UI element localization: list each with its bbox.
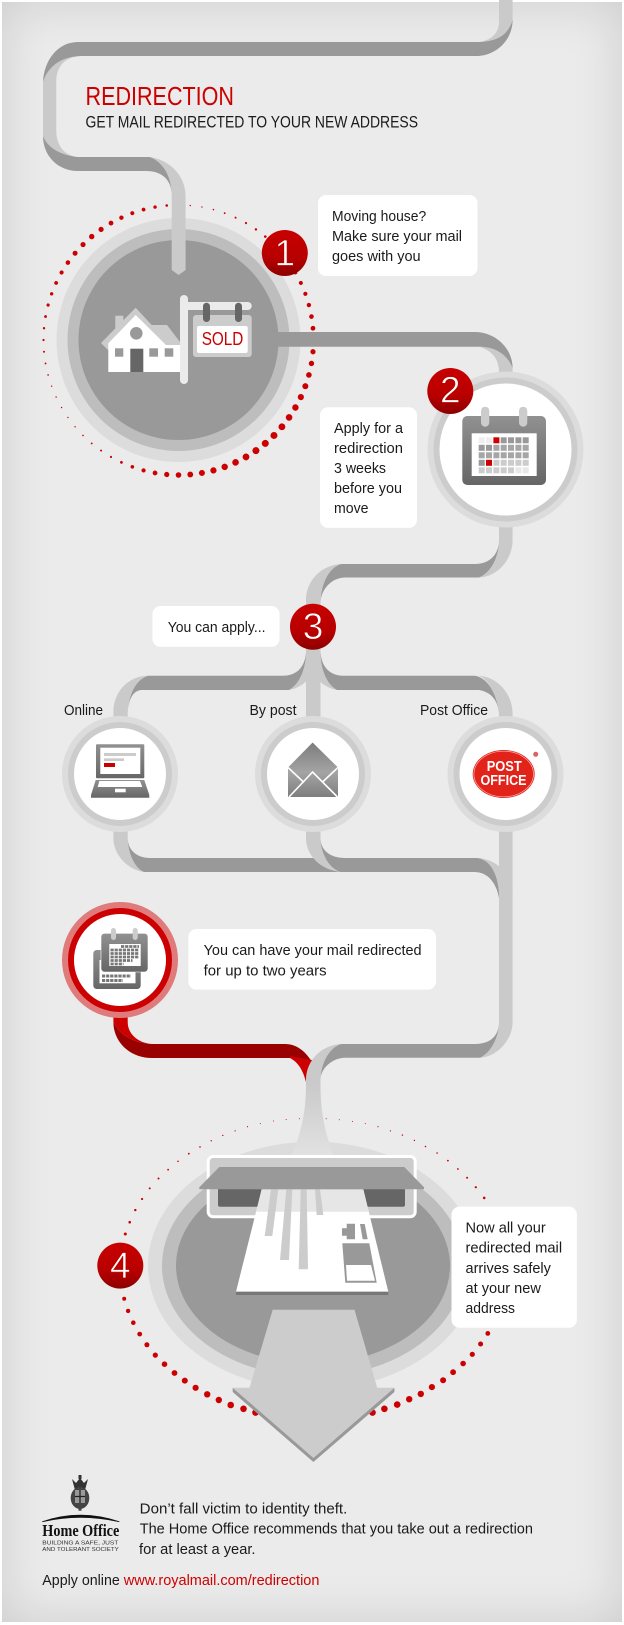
label: by post: By post (250, 702, 297, 719)
footer: apply online link: Apply online (42, 1572, 120, 1589)
badge 2 (427, 368, 473, 414)
callout: apply: before you (334, 480, 402, 497)
circle: post office with logo (448, 716, 564, 832)
callout: you can apply (152, 606, 280, 647)
footer: identity theft advice: Don’t fall victim to identity theft. (140, 1500, 347, 1517)
footer: apply online link (42, 1572, 319, 1589)
label: online: Online (64, 702, 103, 719)
badge 3 (290, 604, 336, 650)
callout: apply (320, 407, 417, 528)
logo: Home Office (42, 1475, 120, 1553)
ribbon: funnel into letterbox (291, 1085, 334, 1157)
circle: step 1 (56, 218, 300, 462)
circle: step 2 (428, 372, 584, 528)
logo: Home Office: BUILDING A SAFE, JUST (42, 1541, 119, 1547)
callout: moving house (318, 195, 478, 276)
callout: arrives safely: at your new (466, 1280, 541, 1297)
callout: you can apply: You can apply... (168, 619, 266, 636)
footer: identity theft advice: for at least a year. (139, 1541, 256, 1558)
dotted ring: step 1 (42, 204, 316, 478)
callout: arrives safely (452, 1207, 577, 1328)
ribbon: step 1 to step 2 (278, 332, 513, 385)
ribbons: merging below the three routes (113, 825, 513, 898)
ellipse: step 4 (148, 1142, 478, 1390)
callout: arrives safely: address (466, 1300, 515, 1317)
ribbon: post office route to letterbox (306, 825, 513, 1090)
ribbons: step 3 branches (113, 645, 513, 725)
title: GET MAIL REDIRECTED TO YOUR NEW ADDRESS (86, 112, 418, 131)
label: post office: Post Office (420, 702, 488, 719)
circle: two years with stacked calendars icon (62, 902, 178, 1018)
callout: arrives safely: arrives safely (466, 1260, 551, 1277)
logo: Home Office: Home Office (42, 1521, 120, 1540)
circle: post office with logo: POST (487, 759, 522, 775)
circle: post office with logo: OFFICE (480, 773, 527, 789)
badge 1: 1 (275, 232, 295, 274)
badge 3: 3 (303, 606, 323, 647)
callout: two years: You can have your mail redirected (204, 942, 422, 959)
badge 1 (262, 230, 308, 276)
callout: two years (188, 929, 436, 990)
badge 4: 4 (110, 1245, 131, 1286)
callout: apply: move (334, 500, 368, 517)
icon: house and sold sign: SOLD (202, 328, 243, 349)
callout: arrives safely: Now all your (466, 1220, 546, 1236)
circle: online with laptop icon (62, 716, 178, 832)
footer: identity theft advice (139, 1500, 533, 1558)
callout: two years: for up to two years (204, 962, 327, 979)
badge 2: 2 (440, 370, 461, 410)
callout: apply: 3 weeks (334, 460, 386, 477)
title (86, 83, 418, 131)
callout: arrives safely: redirected mail (466, 1240, 562, 1257)
badge 4 (97, 1243, 143, 1289)
callout: apply: Apply for a (334, 420, 404, 437)
icon: calendar (462, 407, 546, 485)
ribbon: red path to letterbox (113, 1015, 312, 1082)
footer: apply online link: www.royalmail.com/redirection (123, 1572, 319, 1589)
circle: by post with envelope icon (255, 716, 371, 832)
dotted ring: step 4 (122, 1118, 490, 1416)
callout: moving house: Moving house? (332, 208, 426, 225)
arrow: down (233, 1310, 394, 1462)
title: REDIRECTION (86, 83, 234, 111)
callout: moving house: goes with you (332, 248, 421, 265)
footer: identity theft advice: The Home Office recommends that you take out a redirection (140, 1521, 533, 1538)
ribbon: step 2 to step 3 (306, 520, 513, 610)
callout: apply: redirection (334, 440, 403, 457)
callout: moving house: Make sure your mail (332, 228, 462, 245)
icon: house and sold sign (101, 295, 252, 384)
logo: Home Office: AND TOLERANT SOCIETY (42, 1547, 119, 1553)
ribbon: top to step 1 (43, 0, 513, 275)
icon: letterbox and letter (199, 1156, 424, 1295)
